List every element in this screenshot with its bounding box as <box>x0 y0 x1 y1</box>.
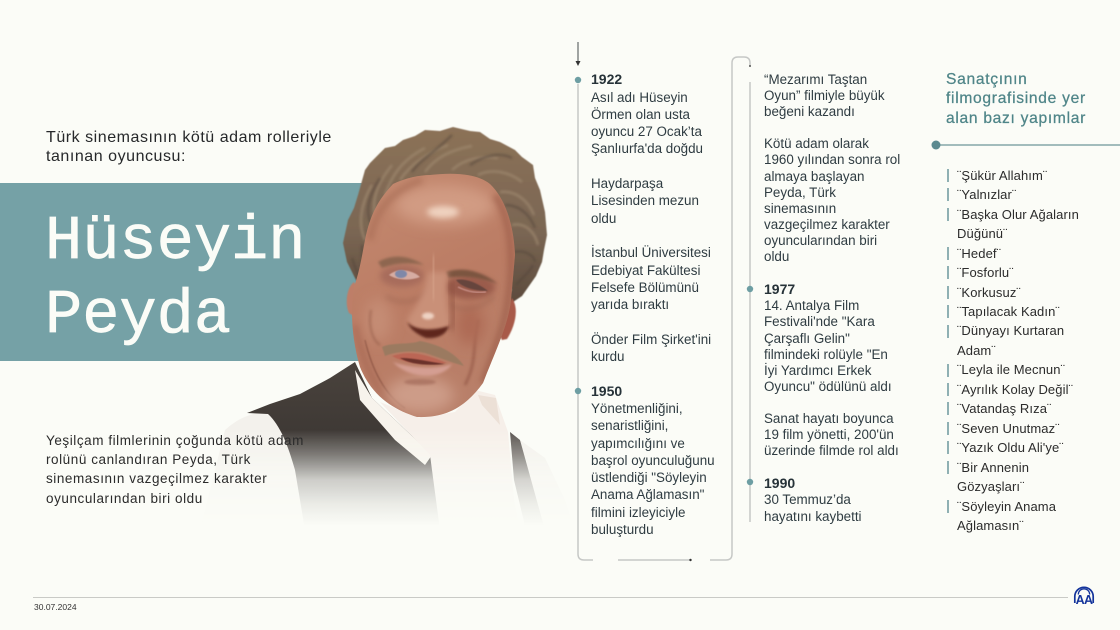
filmography heading: Sanatçının <box>946 70 1028 88</box>
footer line <box>33 597 1068 598</box>
timeline column 1: Örmen olan usta <box>591 107 690 122</box>
moustache and mouth <box>382 341 464 385</box>
logo: AA <box>1074 586 1094 607</box>
timeline column 2: 19 film yönetti, 200'ün <box>764 427 894 442</box>
name title: Peyda <box>45 280 231 351</box>
description text <box>46 432 304 506</box>
shirt and vest <box>221 362 540 514</box>
film list: ¨Söyleyin Anama <box>957 498 1056 514</box>
brows and eyes <box>378 257 498 309</box>
timeline column 2: 1960 yılından sonra rol <box>764 152 900 167</box>
filmography heading: filmografisinde yer <box>946 90 1086 107</box>
description text: oyuncularından biri oldu <box>46 491 203 506</box>
film list: Düğünü¨ <box>957 226 1008 241</box>
timeline column 2: Oyuncu" ödülünü aldı <box>764 379 892 394</box>
timeline column 2: beğeni kazandı <box>764 104 855 119</box>
description text: sinemasının vazgeçilmez karakter <box>46 471 267 486</box>
date: 30.07.2024 <box>34 602 77 612</box>
intro text <box>46 128 332 165</box>
timeline column 1: 1950 <box>591 383 622 399</box>
intro text: tanınan oyuncusu: <box>46 148 186 165</box>
timeline column 2: Çarşaflı Gelin" <box>764 330 850 346</box>
timeline column 2: almaya başlayan <box>764 169 864 184</box>
film list: Gözyaşları¨ <box>957 479 1025 494</box>
description text: rolünü canlandıran Peyda, Türk <box>46 452 251 467</box>
timeline column 1: Yönetmenliğini, <box>591 401 683 416</box>
film list: Ağlamasın¨ <box>957 518 1024 533</box>
film list: ¨Korkusuz¨ <box>957 285 1021 300</box>
logo: AA: AA <box>1076 593 1093 607</box>
timeline column 2: 1990 <box>764 475 795 491</box>
intro text: Türk sinemasının kötü adam rolleriyle <box>46 128 332 146</box>
timeline column 2: Festivali'nde "Kara <box>764 314 875 329</box>
timeline column 2: üzerinde filmde rol aldı <box>764 443 899 458</box>
timeline column 1: Şanlıurfa'da doğdu <box>591 141 703 156</box>
film list: ¨Yazık Oldu Ali'ye¨ <box>957 440 1064 455</box>
film list: ¨Vatandaş Rıza¨ <box>957 401 1051 416</box>
timeline column 1: buluşturdu <box>591 522 654 537</box>
timeline column 2: “Mezarımı Taştan <box>764 72 867 87</box>
filmography heading: alan bazı yapımlar <box>946 110 1086 126</box>
portrait of Hüseyin Peyda <box>221 126 548 514</box>
timeline column 1: Önder Film Şirket'ini <box>591 332 711 347</box>
name title <box>45 206 305 351</box>
timeline dots <box>575 77 753 485</box>
film list: ¨Yalnızlar¨ <box>957 187 1016 202</box>
hair <box>343 127 547 304</box>
timeline column 2: filmindeki rolüyle "En <box>764 347 888 362</box>
timeline column 2: sinemasının <box>764 201 836 216</box>
timeline column 2: Kötü adam olarak <box>764 136 869 151</box>
timeline column 1: başrol oyunculuğunu <box>591 453 715 468</box>
film list: ¨Dünyayı Kurtaran <box>957 323 1064 338</box>
nose <box>407 255 453 338</box>
heading rule with dot <box>932 140 1120 150</box>
timeline column 2: İyi Yardımcı Erkek <box>764 363 871 378</box>
film list: ¨Ayrılık Kolay Değil¨ <box>957 382 1073 397</box>
timeline column 1: Anama Ağlamasın" <box>591 487 704 502</box>
timeline column 1: yarıda bıraktı <box>591 297 669 312</box>
timeline column 1: senaristliğini, <box>591 418 668 433</box>
film list: ¨Tapılacak Kadın¨ <box>957 304 1060 319</box>
timeline column 2: Peyda, Türk <box>764 185 836 200</box>
timeline column 2: Oyun” filmiyle büyük <box>764 88 885 103</box>
timeline column 1 <box>591 71 715 537</box>
film list: Adam¨ <box>957 343 996 358</box>
timeline column 2: oldu <box>764 249 789 264</box>
timeline column 1: üstlendiği "Söyleyin <box>591 470 707 485</box>
timeline column 2: 14. Antalya Film <box>764 298 859 313</box>
face <box>352 174 515 418</box>
description text: Yeşilçam filmlerinin çoğunda kötü adam <box>46 432 304 448</box>
timeline column 2: hayatını kaybetti <box>764 509 862 524</box>
timeline column 1: oyuncu 27 Ocak’ta <box>591 124 702 139</box>
timeline column 2: 30 Temmuz’da <box>764 492 851 507</box>
timeline column 1: yapımcılığını ve <box>591 436 685 451</box>
timeline column 1: filmini izleyiciyle <box>591 505 686 520</box>
film list: ¨Başka Olur Ağaların <box>957 207 1079 222</box>
timeline column 1: Edebiyat Fakültesi <box>591 263 700 278</box>
timeline column 2: 1977 <box>764 281 795 297</box>
timeline column 1: İstanbul Üniversitesi <box>591 245 711 260</box>
teal name band <box>0 183 362 361</box>
timeline column 1: Felsefe Bölümünü <box>591 280 699 295</box>
timeline column 1: Haydarpaşa <box>591 176 663 191</box>
film list <box>947 168 1079 533</box>
timeline column 2 <box>764 72 900 524</box>
name title: Hüseyin <box>45 206 305 277</box>
timeline column 2: oyuncularından biri <box>764 233 877 248</box>
film list: ¨Seven Unutmaz¨ <box>957 421 1060 436</box>
timeline column 2: Sanat hayatı boyunca <box>764 411 894 426</box>
ears <box>347 282 516 340</box>
film list: ¨Leyla ile Mecnun¨ <box>957 362 1065 377</box>
film list: ¨Şükür Allahım¨ <box>957 168 1047 183</box>
filmography heading <box>946 70 1086 127</box>
timeline column 1: Lisesinden mezun <box>591 193 699 208</box>
timeline column 2: vazgeçilmez karakter <box>764 217 890 232</box>
timeline column 1: Asıl adı Hüseyin <box>591 90 688 105</box>
film list: ¨Bir Annenin <box>957 460 1029 475</box>
timeline column 1: 1922 <box>591 71 622 87</box>
timeline column 1: kurdu <box>591 349 624 364</box>
timeline column 1: oldu <box>591 211 616 226</box>
film list: ¨Hedef¨ <box>957 246 1001 261</box>
arrow <box>576 42 580 66</box>
film list: ¨Fosforlu¨ <box>957 265 1014 280</box>
